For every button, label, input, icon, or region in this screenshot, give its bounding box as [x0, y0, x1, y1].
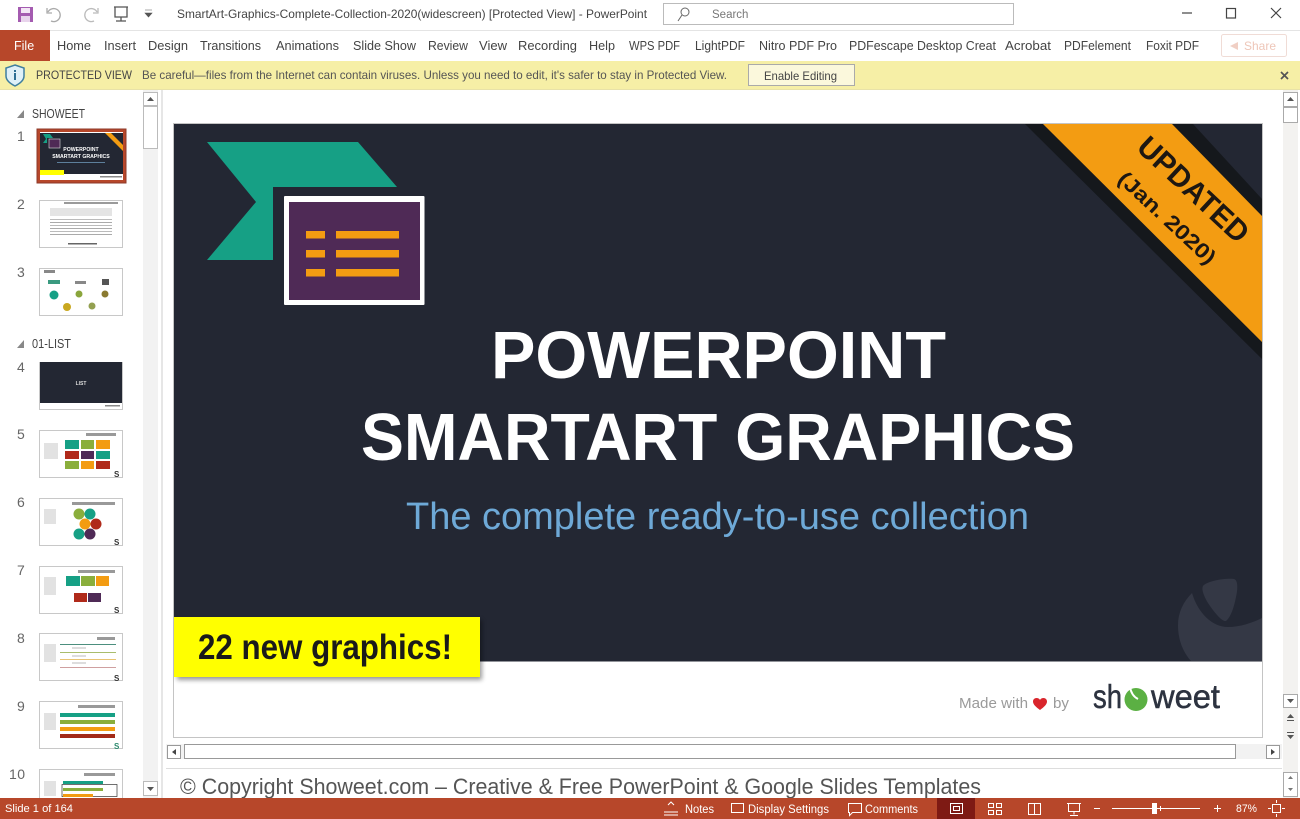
- notes button: [664, 802, 714, 816]
- ribbon tabs: Foxit PDF: [1146, 39, 1199, 53]
- enable editing button: [748, 64, 854, 86]
- icon: list logo: [207, 142, 424, 305]
- file tab: File: [14, 39, 34, 53]
- thumbnail 9: S: [114, 742, 120, 751]
- corner ribbon: [1025, 124, 1262, 359]
- icon: undo: [47, 8, 60, 22]
- protected view message: Be careful—files from the Internet can contain viruses. Unless you need to edit, it's safer to stay in Protected View.: [142, 68, 727, 82]
- thumbnail 6: [40, 498, 122, 547]
- thumbnail 4: LIST: [76, 381, 86, 387]
- thumbnail 2: [40, 200, 122, 248]
- icon: customize toolbar: [145, 10, 152, 17]
- ribbon tabs: Design: [148, 39, 188, 53]
- view buttons: [937, 798, 1081, 819]
- icon: heart: [1033, 698, 1047, 710]
- ribbon tabs: PDFescape Desktop Creat: [849, 39, 997, 53]
- ribbon tabs: View: [479, 39, 508, 53]
- ribbon tabs: Recording: [518, 39, 577, 53]
- callout: 22 new graphics: [174, 617, 482, 680]
- ribbon tabs: [0, 30, 1300, 61]
- icon: presentation: [114, 7, 128, 21]
- thumbnail 1: SMARTART GRAPHICS: [52, 154, 110, 160]
- close icon: [1281, 72, 1288, 79]
- thumbnail scrollbar: [143, 90, 158, 798]
- thumbnail 7: S: [114, 606, 120, 615]
- section: 01-LIST: [17, 337, 71, 351]
- window controls: [1182, 8, 1281, 18]
- file tab: [0, 30, 50, 61]
- icon: green o: [1124, 687, 1148, 711]
- notes button: Notes: [685, 804, 714, 816]
- panel: slide: [174, 124, 1262, 738]
- title bar: [18, 4, 1281, 24]
- watermark logo: [1178, 579, 1262, 661]
- section: 01-LIST: 01-LIST: [32, 337, 71, 351]
- section: SHOWEET: [17, 107, 85, 121]
- thumbnail 3: [40, 268, 122, 316]
- search box: Search: [712, 9, 748, 21]
- thumbnail 1: POWERPOINT: [63, 147, 100, 153]
- enable editing button: Enable Editing: [764, 69, 837, 83]
- ribbon tabs: WPS PDF: [629, 39, 680, 53]
- vertical scrollbar: [1283, 90, 1298, 798]
- slide numbers: 1: [17, 128, 25, 144]
- zoom percent: 87%: [1236, 803, 1257, 815]
- slide counter: Slide 1 of 164: [5, 803, 73, 815]
- protected view bar: [0, 61, 1300, 90]
- ribbon text: date: (Jan. 2020): [1113, 167, 1220, 269]
- showeet logo: [1093, 678, 1220, 715]
- slide numbers: 10: [9, 766, 25, 782]
- slide numbers: 6: [17, 494, 25, 510]
- ribbon tabs: LightPDF: [695, 39, 745, 53]
- ribbon tabs: Help: [589, 39, 615, 53]
- comments button: Comments: [865, 804, 918, 816]
- slide background: [174, 124, 1262, 662]
- icon: fit to window: [1268, 800, 1285, 817]
- ribbon tabs: PDFelement: [1064, 39, 1131, 53]
- zoom slider: [1094, 803, 1221, 814]
- ribbon tabs: Animations: [276, 39, 339, 53]
- callout: 22 new graphics: 22 new graphics!: [198, 628, 452, 667]
- ribbon tabs: Transitions: [200, 39, 261, 53]
- slide title: POWERPOINT: [491, 318, 946, 393]
- teal banner: [207, 142, 397, 260]
- slide numbers: 7: [17, 562, 25, 578]
- thumbnail 4: [40, 362, 122, 410]
- slide numbers: 2: [17, 196, 25, 212]
- protected view label: PROTECTED VIEW: [36, 68, 133, 82]
- ribbon tabs: Review: [428, 39, 469, 53]
- slide numbers: 4: [17, 359, 25, 375]
- thumbnail 8: [40, 634, 122, 683]
- slide title: SMARTART GRAPHICS: [361, 400, 1075, 475]
- showeet logo: sh: [1093, 678, 1122, 715]
- made with love credit: by: [1053, 696, 1070, 712]
- icon: redo: [85, 8, 98, 22]
- thumbnail 10: [40, 770, 122, 800]
- ribbon tabs: Slide Show: [353, 39, 417, 53]
- made with love credit: Made with: [959, 696, 1028, 712]
- slide numbers: 3: [17, 264, 25, 280]
- thumbnail 9: [40, 702, 122, 751]
- search box: [664, 4, 1014, 24]
- slide numbers: 8: [17, 630, 25, 646]
- panel: slide thumbnails: [9, 90, 163, 800]
- icon: shield: [6, 65, 24, 86]
- share button: Share: [1244, 39, 1276, 53]
- ribbon text: updated: UPDATED: [1131, 130, 1255, 250]
- status bar: [0, 798, 1300, 819]
- icon: save: [18, 7, 33, 22]
- ribbon tabs: Acrobat: [1005, 39, 1052, 53]
- slide numbers: [9, 128, 25, 782]
- thumbnail 5: S: [114, 470, 120, 479]
- slide subtitle: The complete ready-to-use collection: [406, 496, 1029, 538]
- purple card: [284, 196, 424, 305]
- thumbnail 1: [37, 129, 126, 183]
- display settings button: Display Settings: [748, 804, 829, 816]
- thumbnail 8: S: [114, 674, 120, 683]
- thumbnail 7: [40, 566, 122, 615]
- showeet logo: weet: [1150, 678, 1220, 715]
- slide title: [361, 318, 1075, 475]
- ribbon tabs: Home: [57, 39, 91, 53]
- document title: SmartArt-Graphics-Complete-Collection-2020(widescreen) [Protected View] - PowerPoint: [177, 7, 648, 21]
- slide numbers: 9: [17, 698, 25, 714]
- share button: [1222, 34, 1286, 56]
- slide numbers: 5: [17, 426, 25, 442]
- thumbnail 5: [40, 430, 122, 479]
- thumbnail 6: S: [114, 538, 120, 547]
- notes area: copyright: © Copyright Showeet.com – Creative & Free PowerPoint & Google Slides Templates: [180, 774, 981, 799]
- ribbon tabs: Insert: [104, 39, 137, 53]
- made with love credit: [959, 696, 1070, 712]
- section: SHOWEET: SHOWEET: [32, 107, 85, 121]
- horizontal scrollbar: [166, 744, 1282, 759]
- ribbon tabs: Nitro PDF Pro: [759, 39, 837, 53]
